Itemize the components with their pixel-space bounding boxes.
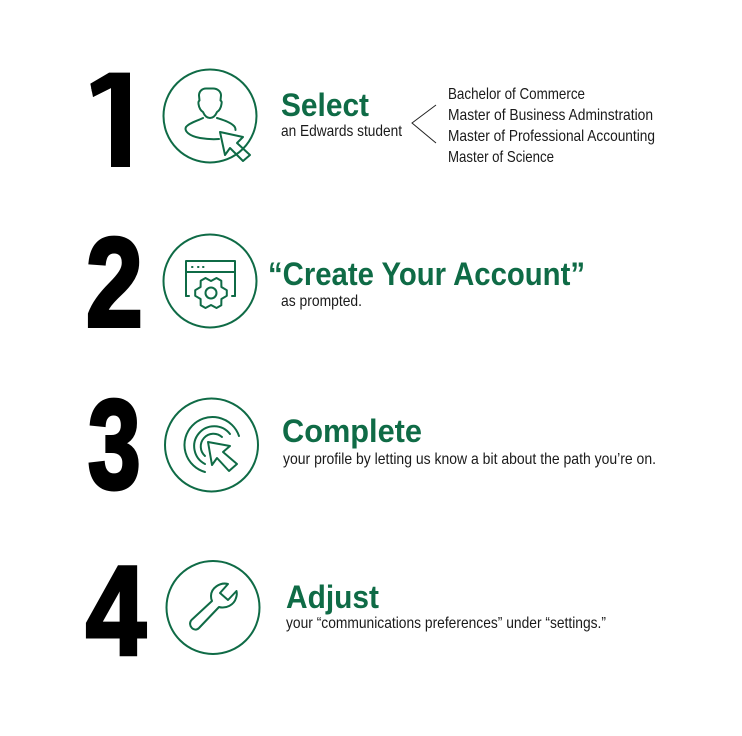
step 1: [90, 68, 654, 167]
number 3: 3: [88, 374, 141, 515]
heading: Select: Select: [281, 87, 369, 123]
infographic: [86, 68, 655, 656]
step 3: [88, 374, 656, 515]
list of programs: [448, 86, 655, 166]
number 1: 1: [76, 48, 156, 194]
icon: user with cursor: [164, 70, 256, 162]
heading: Adjust: Adjust: [286, 579, 379, 615]
text: profile description: your profile by letting us know a bit about the path you’re on.: [283, 451, 656, 468]
text: communications preferences: your “communications preferences” under “settings.”: [286, 615, 606, 632]
step 2: [86, 213, 585, 353]
heading: Complete: Complete: [282, 413, 422, 449]
icon: cursor with signal arcs: [165, 398, 258, 492]
number 4: 4: [86, 540, 146, 681]
step 4: [86, 540, 606, 681]
list of programs: Bachelor of Commerce: [448, 86, 585, 103]
icon: wrench: [166, 561, 260, 654]
text: as prompted: as prompted.: [281, 293, 362, 310]
icon: browser with gear: [164, 234, 256, 328]
list of programs: Master of Professional Accounting: [448, 128, 655, 145]
number 2: 2: [86, 213, 143, 353]
heading: Create Your Account: “Create Your Account”: [268, 256, 585, 292]
list of programs: Master of Business Adminstration: [448, 107, 653, 124]
list of programs: Master of Science: [448, 149, 554, 166]
text: an Edwards student: an Edwards student: [281, 123, 402, 140]
bracket: [412, 105, 436, 143]
